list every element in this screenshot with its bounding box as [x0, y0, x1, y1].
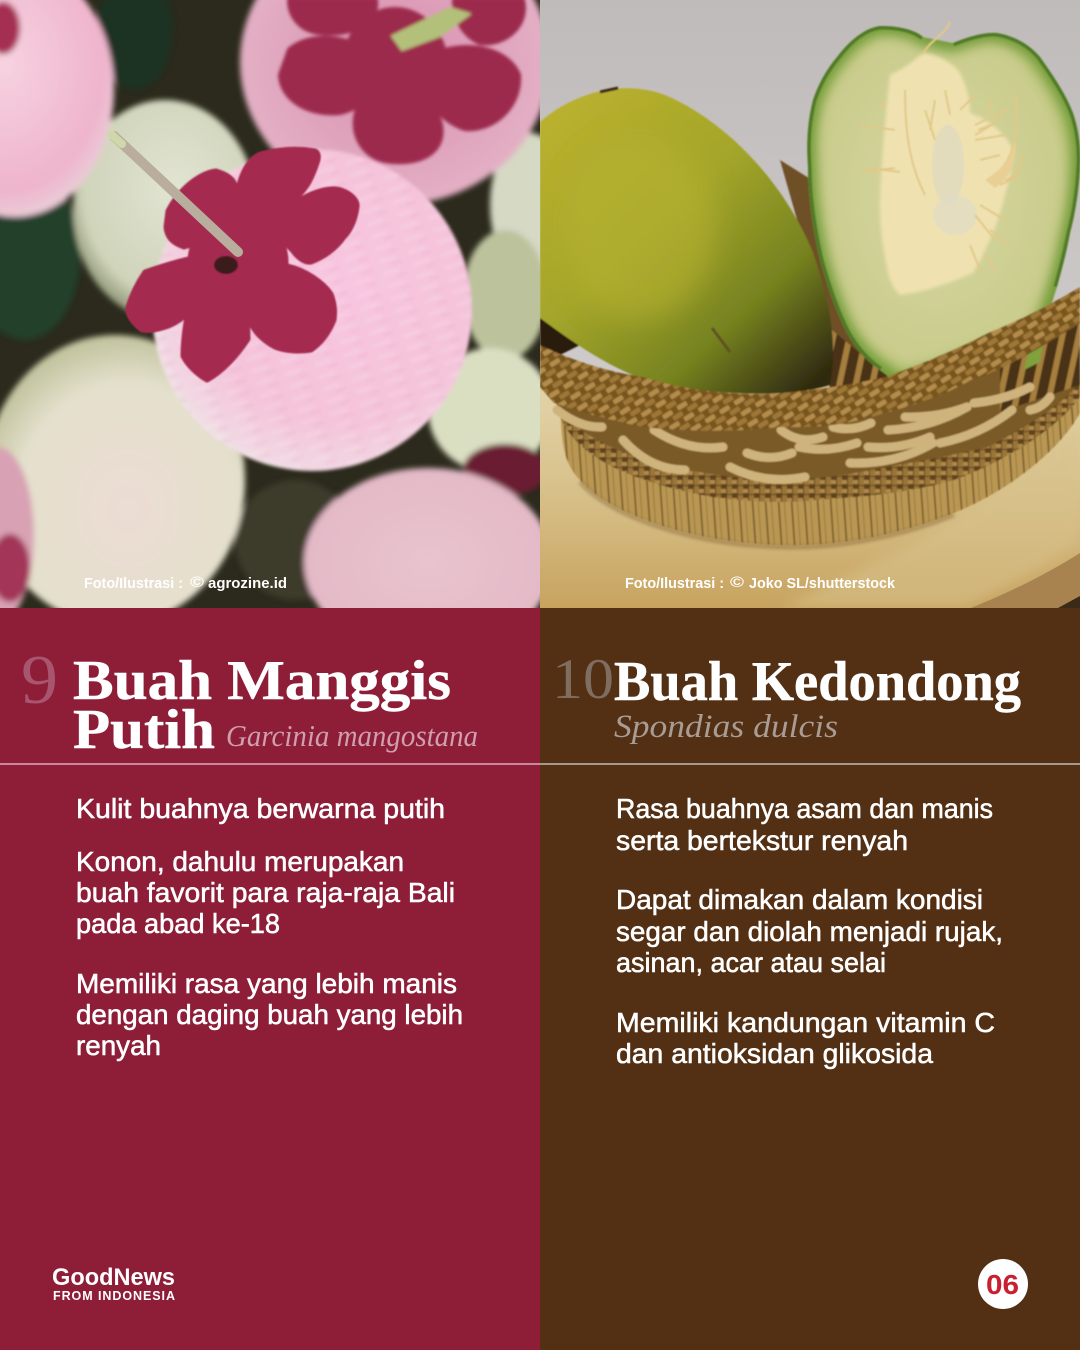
- icon: top fruit flower: [281, 0, 523, 161]
- caption: left photo credit: ©: [190, 574, 204, 591]
- text block: left facts: [76, 793, 463, 1061]
- cream strands band: [558, 369, 1076, 479]
- panel: left background: [0, 0, 540, 1350]
- text block: left facts: Memiliki rasa yang lebih manis: [76, 968, 457, 999]
- heading: Buah Kedondong: Buah Kedondong: [614, 651, 1021, 713]
- caption: left photo credit: Foto/Ilustrasi :: [84, 575, 183, 592]
- page number badge: [978, 1259, 1028, 1309]
- heading: Buah Manggis Putih: Putih: [73, 699, 215, 761]
- text block: left facts: pada abad ke-18: [76, 908, 280, 939]
- photo: kedondong fruit in woven basket: [540, 0, 1080, 608]
- text block: right facts: Rasa buahnya asam dan manis: [616, 793, 993, 824]
- caption: right photo credit: Foto/Ilustrasi :: [625, 575, 724, 592]
- text block: left facts: dengan daging buah yang lebih: [76, 999, 463, 1030]
- text block: right facts: [616, 793, 1003, 1069]
- text block: left facts: renyah: [76, 1030, 161, 1061]
- text block: right facts: Dapat dimakan dalam kondisi: [616, 884, 983, 915]
- logo: GoodNews from Indonesia: GoodNews: [52, 1264, 175, 1291]
- text block: right facts: Memiliki kandungan vitamin C: [616, 1007, 995, 1038]
- shadow under basket: [580, 482, 954, 547]
- lower weave band: [560, 384, 1080, 502]
- number 9: 9: [21, 642, 58, 719]
- text block: right facts: dan antioksidan glikosida: [616, 1038, 933, 1069]
- logo: GoodNews from Indonesia: [52, 1264, 175, 1303]
- text block: left facts: Kulit buahnya berwarna putih: [76, 793, 445, 824]
- caption: left photo credit: [84, 574, 287, 592]
- basket foot ring: [560, 397, 1080, 546]
- heading: Buah Manggis Putih: Buah Manggis: [73, 650, 451, 712]
- text block: right facts: serta bertekstur renyah: [616, 825, 908, 856]
- caption: right photo credit: Joko SL/shutterstock: [749, 575, 896, 592]
- basket back and interior: [779, 160, 888, 388]
- icon: whole kedondong: [540, 88, 833, 394]
- logo: GoodNews from Indonesia: FROM INDONESIA: [53, 1289, 175, 1303]
- text block: left facts: buah favorit para raja-raja Bali: [76, 877, 455, 908]
- page number badge: 06: [986, 1269, 1019, 1300]
- number 10: 10: [552, 648, 614, 711]
- caption: left photo credit: agrozine.id: [208, 575, 287, 592]
- icon: fibrous seed: [860, 22, 1022, 295]
- icon: main fruit flower: [128, 149, 357, 380]
- main fruit body: [152, 149, 472, 471]
- text block: left facts: Konon, dahulu merupakan: [76, 846, 404, 877]
- icon: fruit stem: [114, 136, 238, 252]
- caption: right photo credit: ©: [730, 574, 744, 591]
- panel: right background: [540, 0, 1080, 1350]
- text block: right facts: asinan, acar atau selai: [616, 947, 886, 978]
- icon: halved kedondong: [807, 26, 1080, 385]
- subtitle: Garcinia mangostana: Garcinia mangostana: [226, 718, 478, 753]
- heading: Buah Manggis Putih: [73, 650, 451, 761]
- basket rim: [540, 287, 1080, 431]
- text block: right facts: segar dan diolah menjadi rujak,: [616, 916, 1003, 947]
- subtitle: Spondias dulcis: Spondias dulcis: [614, 709, 838, 745]
- photo: white mangosteen fruits: [0, 0, 540, 608]
- caption: right photo credit: [625, 574, 896, 592]
